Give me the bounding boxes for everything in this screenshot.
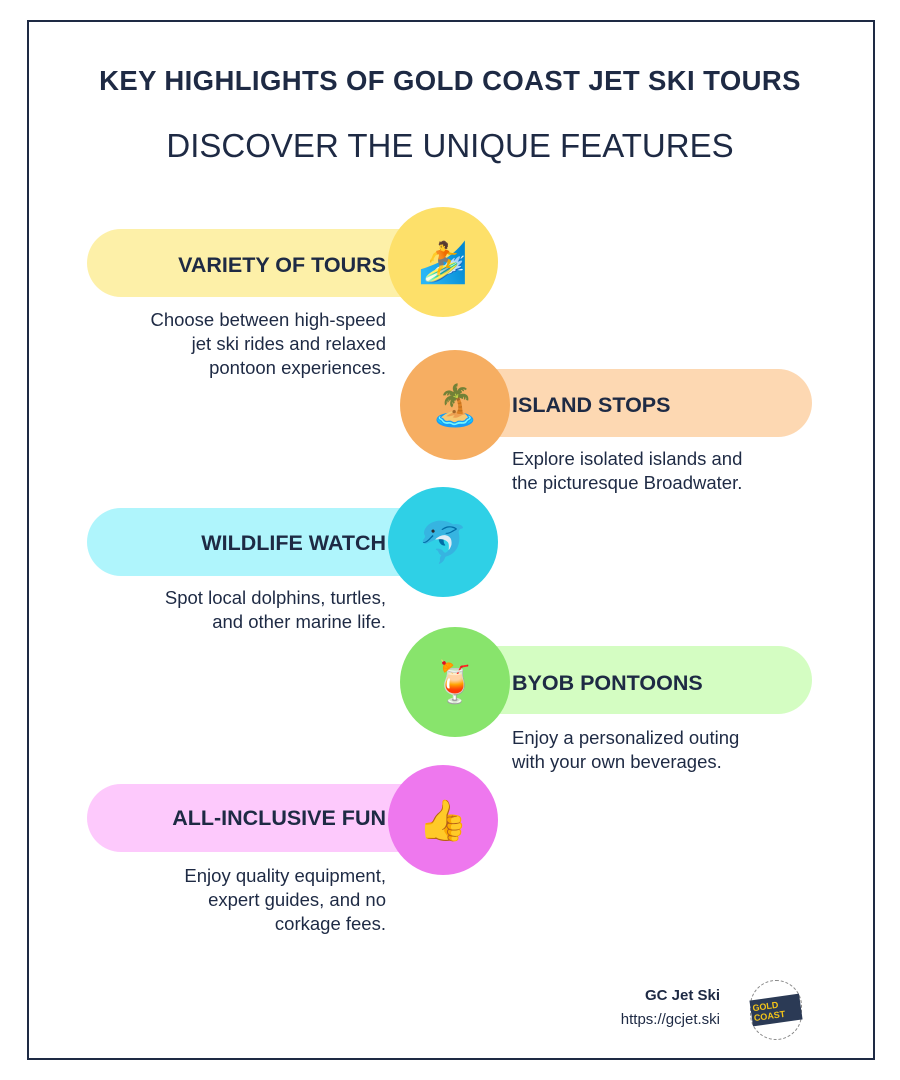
icon: thumbs up [388, 765, 498, 875]
desc: all-inclusive: Enjoy quality equipment, expert guides, and no corkage fees. [184, 865, 386, 934]
item 2: island stops [400, 350, 812, 493]
footer brand: GC Jet Ski [645, 987, 720, 1004]
desc: island: Explore isolated islands and the picturesque Broadwater. [512, 448, 742, 493]
pill: variety [87, 229, 447, 297]
pill: island [455, 369, 812, 437]
icon: drink: 🍹 [430, 658, 480, 706]
label: wildlife watch: WILDLIFE WATCH [201, 531, 386, 555]
label: byob pontoons: BYOB PONTOONS [512, 671, 703, 695]
desc: wildlife: Spot local dolphins, turtles, and other marine life. [165, 587, 386, 632]
title: KEY HIGHLIGHTS OF GOLD COAST JET SKI TOURS [99, 65, 801, 96]
label: all-inclusive fun: ALL-INCLUSIVE FUN [172, 806, 386, 830]
icon: surfer [388, 207, 498, 317]
footer brand [621, 987, 720, 1028]
icon: dolphin: 🐬 [418, 518, 468, 566]
icon: thumbs up: 👍 [418, 796, 468, 844]
logo: GOLD COAST [752, 1000, 786, 1023]
icon: surfer: 🏄 [418, 238, 468, 286]
footer brand: https://gcjet.ski [621, 1011, 720, 1028]
subtitle: DISCOVER THE UNIQUE FEATURES [166, 127, 734, 164]
icon: island [400, 350, 510, 460]
icon: island: 🏝️ [430, 382, 480, 428]
item 1: variety of tours [87, 207, 498, 378]
icon: drink [400, 627, 510, 737]
pill: all-inclusive [87, 784, 447, 852]
icon: dolphin [388, 487, 498, 597]
logo [750, 980, 802, 1040]
desc: variety: Choose between high-speed jet ski rides and relaxed pontoon experiences. [150, 309, 386, 378]
desc: byob: Enjoy a personalized outing with your own beverages. [512, 727, 739, 772]
pill: wildlife [87, 508, 447, 576]
item 5: all-inclusive fun [87, 765, 498, 934]
label: island stops: ISLAND STOPS [512, 393, 670, 417]
label: variety of tours: VARIETY OF TOURS [178, 253, 386, 277]
item 4: byob pontoons [400, 627, 812, 772]
pill: byob [455, 646, 812, 714]
item 3: wildlife watch [87, 487, 498, 632]
